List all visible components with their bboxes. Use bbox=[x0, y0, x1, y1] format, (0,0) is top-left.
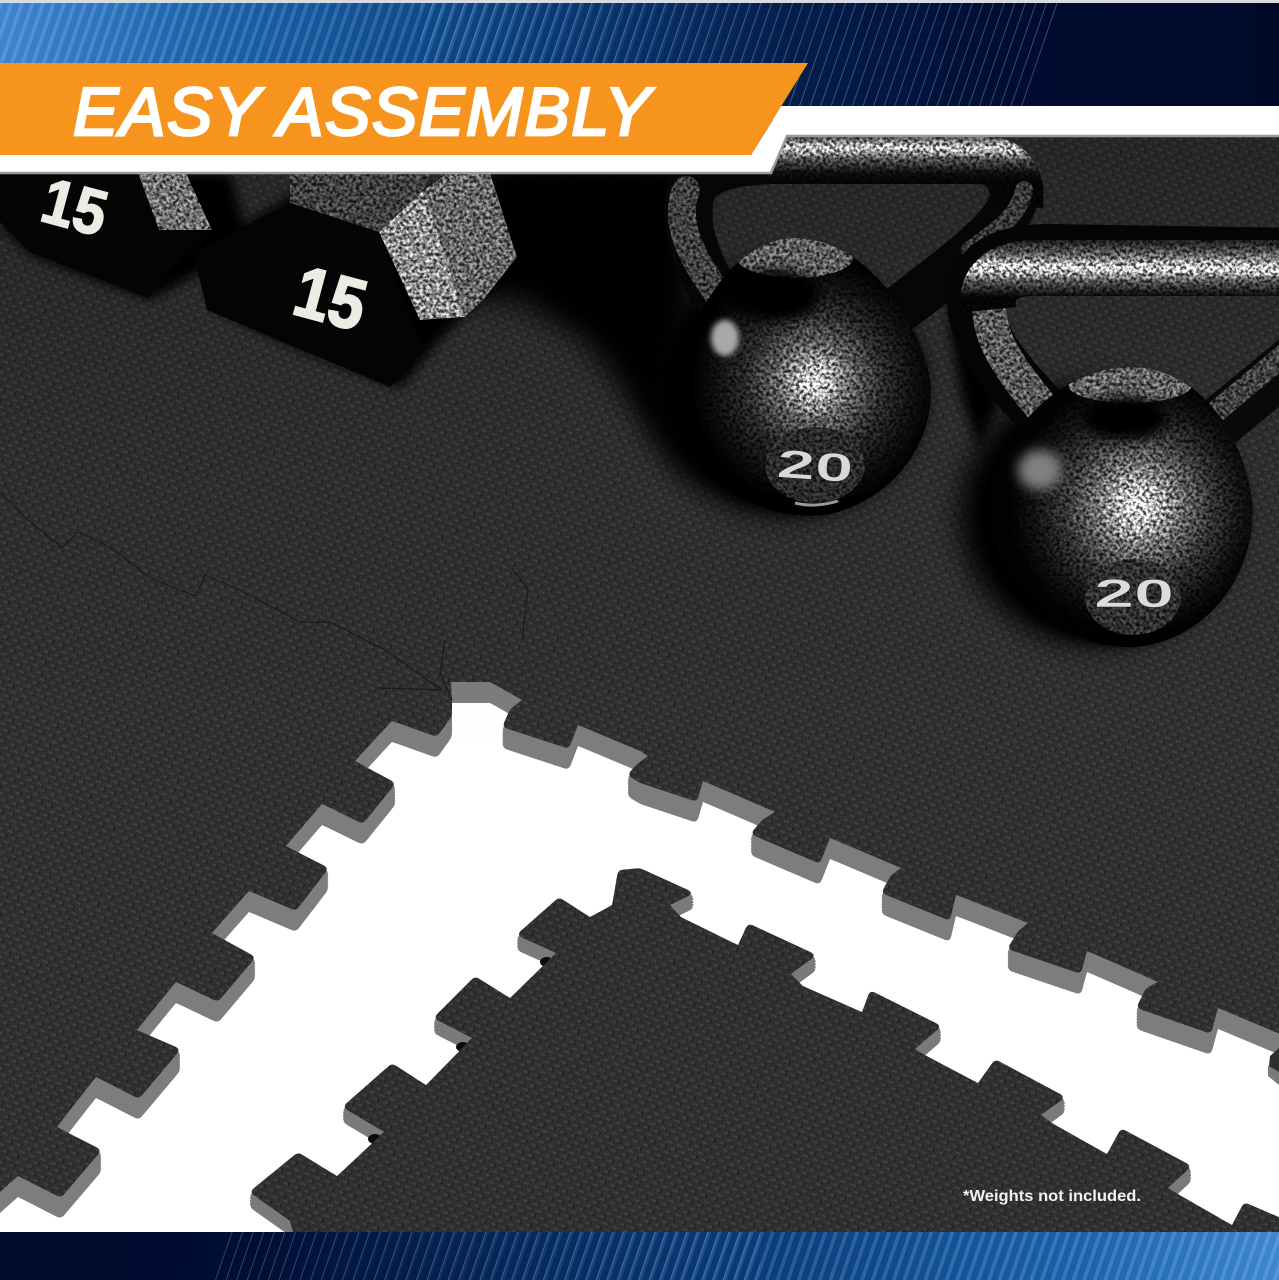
orange parallelogram bbox=[0, 63, 808, 155]
gradient band bbox=[0, 3, 1279, 106]
dome highlight bbox=[1068, 367, 1192, 403]
lower body shade bbox=[670, 420, 940, 530]
kettlebell weight badge: 20 bbox=[1094, 571, 1174, 616]
bright hex side bbox=[379, 190, 465, 320]
kettlebell weight badge bbox=[1085, 559, 1181, 635]
neck dark patch bbox=[1083, 396, 1167, 440]
mat darkening near the weights bbox=[0, 130, 1279, 750]
neck dark patch bbox=[730, 269, 820, 321]
lower body shade bbox=[980, 540, 1260, 660]
dumbbell 15 right bbox=[193, 173, 517, 387]
dumbbell head face bbox=[0, 173, 212, 298]
kettlebell handle bbox=[975, 252, 1279, 430]
top header band bbox=[0, 0, 1279, 106]
thin diagonal stripes bbox=[420, 3, 1058, 106]
mat seam lines bbox=[0, 492, 528, 700]
number 15: 15 bbox=[34, 164, 115, 250]
kettlebell weight badge: 20 bbox=[775, 441, 855, 491]
number 15: 15 bbox=[286, 251, 375, 347]
dumbbell textured side bbox=[138, 173, 212, 230]
footnote: *Weights not included. bbox=[963, 1188, 1141, 1205]
handle collar texture bbox=[290, 173, 431, 232]
notch shadows bbox=[368, 957, 554, 1144]
kettlebell body bbox=[1008, 367, 1252, 648]
ribbon shadow line bbox=[0, 136, 1279, 173]
title banner bbox=[0, 63, 808, 155]
lower foam mat bbox=[249, 868, 1279, 1275]
bottom band bbox=[0, 1232, 1279, 1280]
side glint bbox=[1018, 450, 1062, 490]
kettlebell weight badge bbox=[765, 427, 865, 505]
kettlebell body bbox=[698, 238, 931, 516]
white ribbon under title bbox=[0, 107, 1279, 173]
title: EASY ASSEMBLY bbox=[73, 74, 655, 150]
thin diagonal stripes bbox=[215, 1232, 760, 1280]
lower mat top surface bbox=[249, 868, 1279, 1260]
contact shadows behind weights bbox=[0, 160, 1247, 645]
lower mat side thickness bbox=[249, 871, 1279, 1275]
kettlebell handle bbox=[682, 159, 1024, 310]
side glint bbox=[711, 320, 739, 356]
kettlebell 20 left bbox=[670, 159, 1024, 530]
wide diagonal stripes bbox=[406, 1232, 1279, 1280]
kettlebell 20 right bbox=[975, 252, 1279, 660]
dumbbell 15 left bbox=[0, 164, 212, 298]
grey hex end bbox=[424, 173, 517, 317]
dumbbell head face bbox=[193, 203, 427, 387]
dome highlight bbox=[737, 238, 853, 278]
mat right-edge tab bbox=[1268, 1048, 1279, 1085]
wide diagonal stripes bbox=[0, 3, 705, 63]
